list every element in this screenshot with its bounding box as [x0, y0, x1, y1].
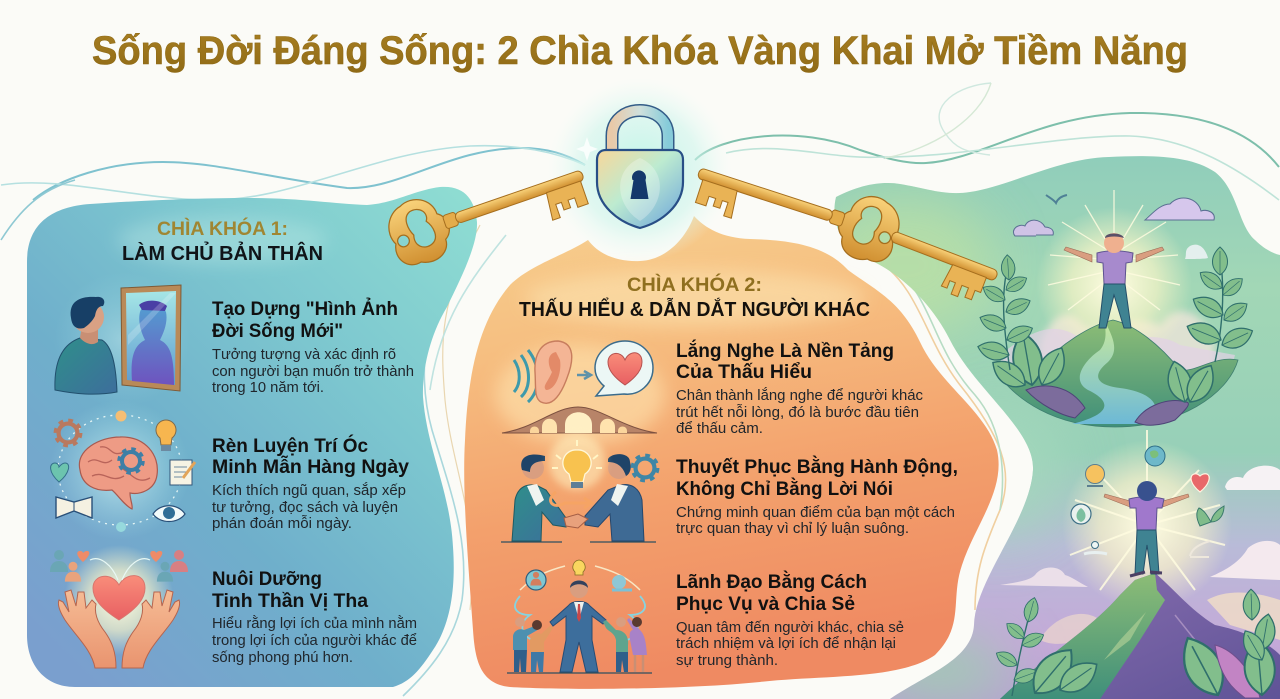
icon: ear, heart and bridge	[495, 341, 665, 445]
item 3 text: key 2: Phục Vụ và Chia Sẻ	[676, 593, 855, 615]
illustration: man on green hill	[976, 190, 1256, 427]
item 1 text: key 2: để thấu cảm.	[676, 421, 763, 437]
heading: key 2	[519, 270, 870, 326]
heading: key 1: CHÌA KHÓA 1:	[157, 218, 288, 240]
item 3 text: key 2: Quan tâm đến người khác, chia sẻ	[676, 620, 904, 636]
item 3 text: key 1: trong lợi ích của người khác để	[212, 633, 417, 649]
item 1 text: key 2: Của Thấu Hiểu	[676, 361, 812, 383]
item 1 text: key 1: Tưởng tượng và xác định rõ	[212, 347, 396, 363]
item 3 text: key 2: Lãnh Đạo Bằng Cách	[676, 569, 867, 593]
icon: man and mirror	[54, 272, 190, 408]
title: Sống Đời Đáng Sống: 2 Chìa Khóa Vàng Khai Mở Tiềm Năng	[92, 29, 1188, 73]
icon: heart in hands	[50, 545, 188, 668]
item 2 text: key 2: Chứng minh quan điểm của bạn một cách	[676, 505, 955, 521]
item 2 text: key 1: phán đoán mỗi ngày.	[212, 515, 352, 532]
item 2 text: key 1	[212, 433, 409, 532]
item 1 text: key 2: Chân thành lắng nghe để người khác	[676, 387, 923, 404]
item 2 text: key 1: Minh Mẫn Hàng Ngày	[212, 454, 409, 478]
item 1 text: key 1: con người bạn muốn trở thành	[212, 364, 414, 380]
item 3 text: key 2	[676, 569, 904, 669]
heading: key 2: CHÌA KHÓA 2:	[627, 274, 762, 296]
item 3 text: key 1: Tinh Thần Vị Tha	[212, 590, 368, 612]
item 1 text: key 2	[676, 338, 923, 437]
heading: key 1: LÀM CHỦ BẢN THÂN	[122, 241, 323, 265]
icon: servant leader with team	[507, 560, 652, 673]
item 3 text: key 1: Nuôi Dưỡng	[212, 568, 322, 590]
panel: key 2 background	[464, 216, 999, 689]
icon: padlock	[548, 78, 732, 262]
item 1 text: key 2: Lắng Nghe Là Nền Tảng	[676, 338, 894, 362]
item 3 text: key 1: sống phong phú hơn.	[212, 650, 353, 666]
heading: key 1	[117, 216, 327, 265]
item 2 text: key 1: tư tưởng, đọc sách và luyện	[212, 500, 398, 516]
item 1 text: key 1: Tạo Dựng "Hình Ảnh	[212, 297, 398, 320]
heading: key 2: THẤU HIỂU & DẪN DẮT NGƯỜI KHÁC	[519, 297, 870, 321]
icon: handshake with light bulb	[501, 434, 658, 542]
item 2 text: key 2: trực quan thay vì chỉ lý luận suông.	[676, 521, 909, 537]
panel: right landscape	[815, 150, 1280, 699]
illustration: man on mountain peak with icons	[993, 430, 1280, 699]
item 3 text: key 2: trách nhiệm và lợi ích để nhận lại	[676, 636, 896, 652]
item 2 text: key 2: Không Chỉ Bằng Lời Nói	[676, 476, 893, 500]
item 2 text: key 2	[676, 454, 958, 537]
item 3 text: key 1	[212, 568, 417, 666]
item 1 text: key 2: trút hết nỗi lòng, đó là bước đầu tiên	[676, 404, 919, 421]
icon: golden key 1	[382, 145, 593, 272]
item 1 text: key 1: trong 10 năm tới.	[212, 380, 324, 396]
icon: golden key 2	[689, 142, 999, 307]
item 1 text: key 1	[212, 297, 414, 396]
item 1 text: key 1: Đời Sống Mới"	[212, 320, 343, 342]
item 3 text: key 1: Hiểu rằng lợi ích của mình nằm	[212, 615, 417, 632]
icon: brain and habits	[50, 400, 195, 540]
item 2 text: key 1: Rèn Luyện Trí Óc	[212, 433, 368, 457]
item 2 text: key 1: Kích thích ngũ quan, sắp xếp	[212, 482, 406, 499]
panel: key 1 background	[27, 187, 477, 687]
item 2 text: key 2: Thuyết Phục Bằng Hành Động,	[676, 454, 958, 478]
item 3 text: key 2: sự trung thành.	[676, 653, 778, 669]
